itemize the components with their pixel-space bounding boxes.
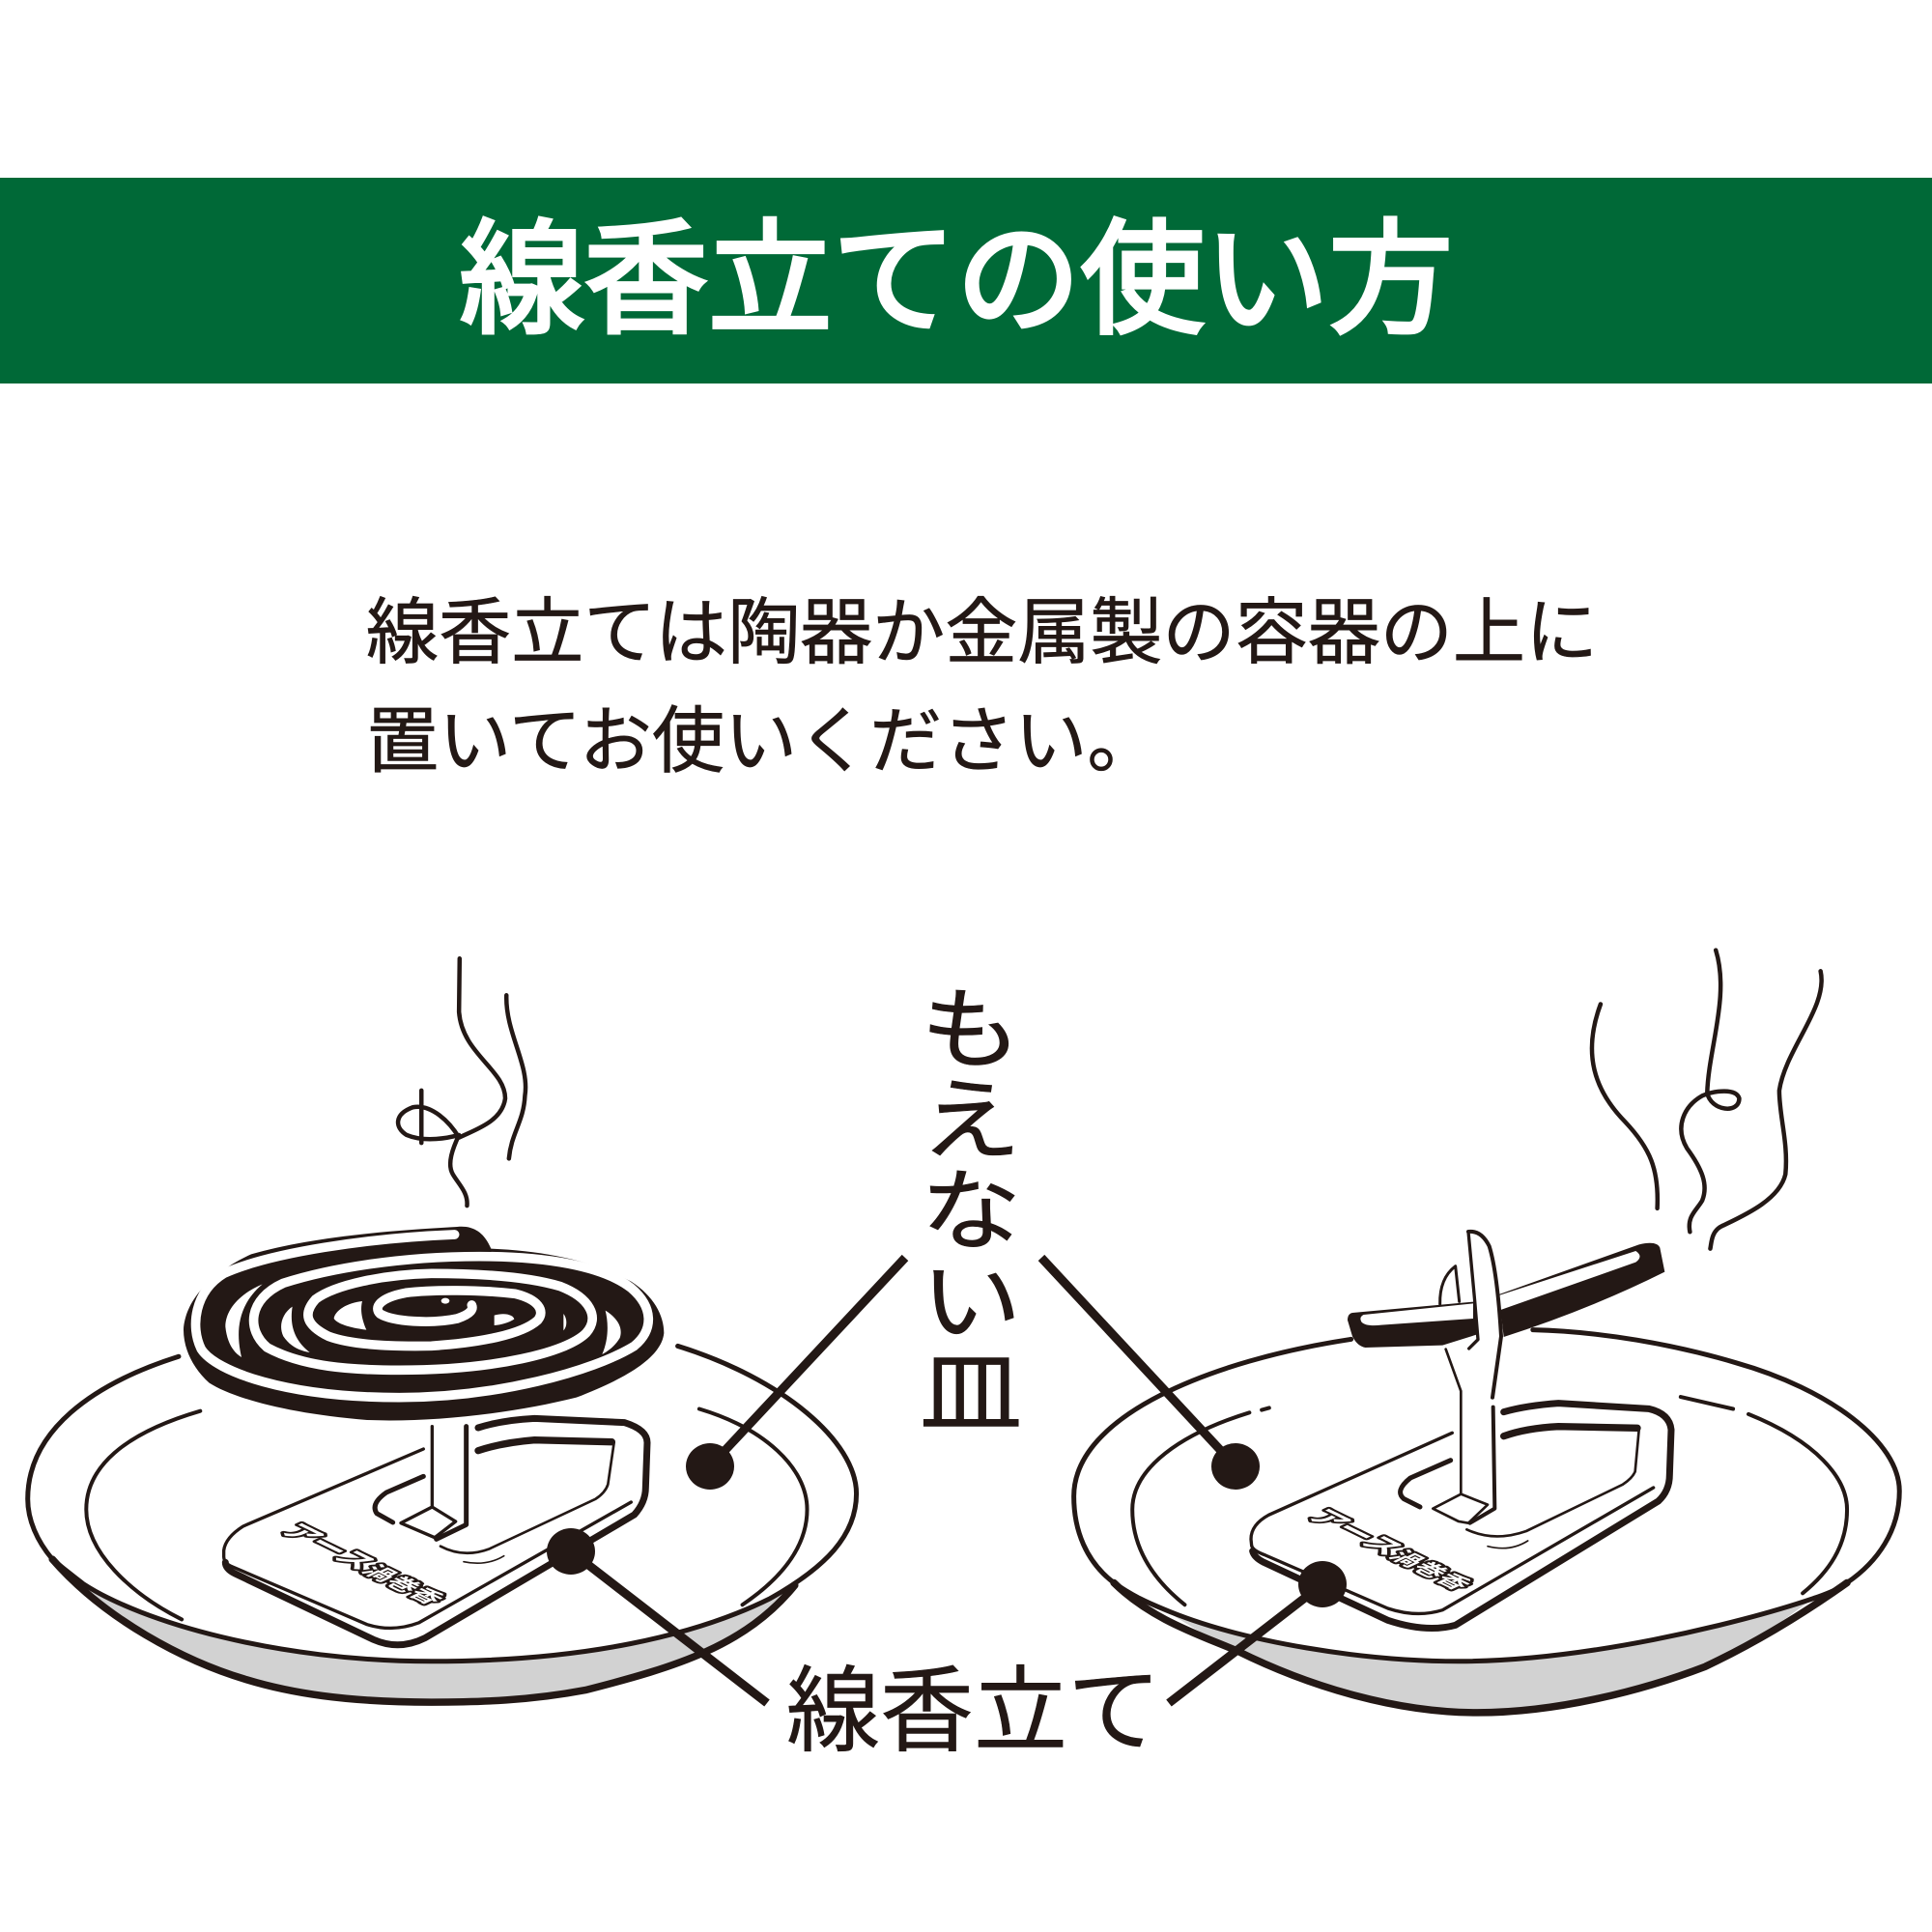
left holder	[224, 1418, 647, 1645]
right holder	[1251, 1232, 1671, 1629]
blade and stem	[1433, 1232, 1500, 1521]
label: incense holder: 線香立て	[786, 1659, 1161, 1764]
right smoke	[1592, 951, 1822, 1249]
instruction text: 線香立ては陶器か金属製の容器の上に	[366, 591, 1598, 672]
coil	[184, 1227, 664, 1420]
instruction text: 置いてお使いください。	[366, 700, 1160, 781]
illustration: mosquito coil on holder over plate	[28, 958, 905, 1703]
small prong	[1440, 1266, 1460, 1304]
stick	[1348, 1301, 1476, 1348]
left callout lines	[547, 1258, 905, 1703]
title: 線香立ての使い方	[460, 212, 1453, 350]
holder brand text: アース渦巻香	[272, 1520, 455, 1608]
title banner	[0, 178, 1932, 384]
illustration: stick on holder over plate	[1041, 951, 1899, 1713]
stem	[401, 1427, 467, 1538]
left plate	[28, 1346, 857, 1702]
right plate	[1074, 1330, 1899, 1713]
left smoke	[398, 958, 526, 1206]
holder brand text: アース渦巻香	[1300, 1505, 1482, 1594]
instruction text	[366, 591, 1598, 781]
right callout lines	[1041, 1258, 1347, 1703]
label: non-flammable plate: もえない皿	[904, 981, 1018, 1435]
